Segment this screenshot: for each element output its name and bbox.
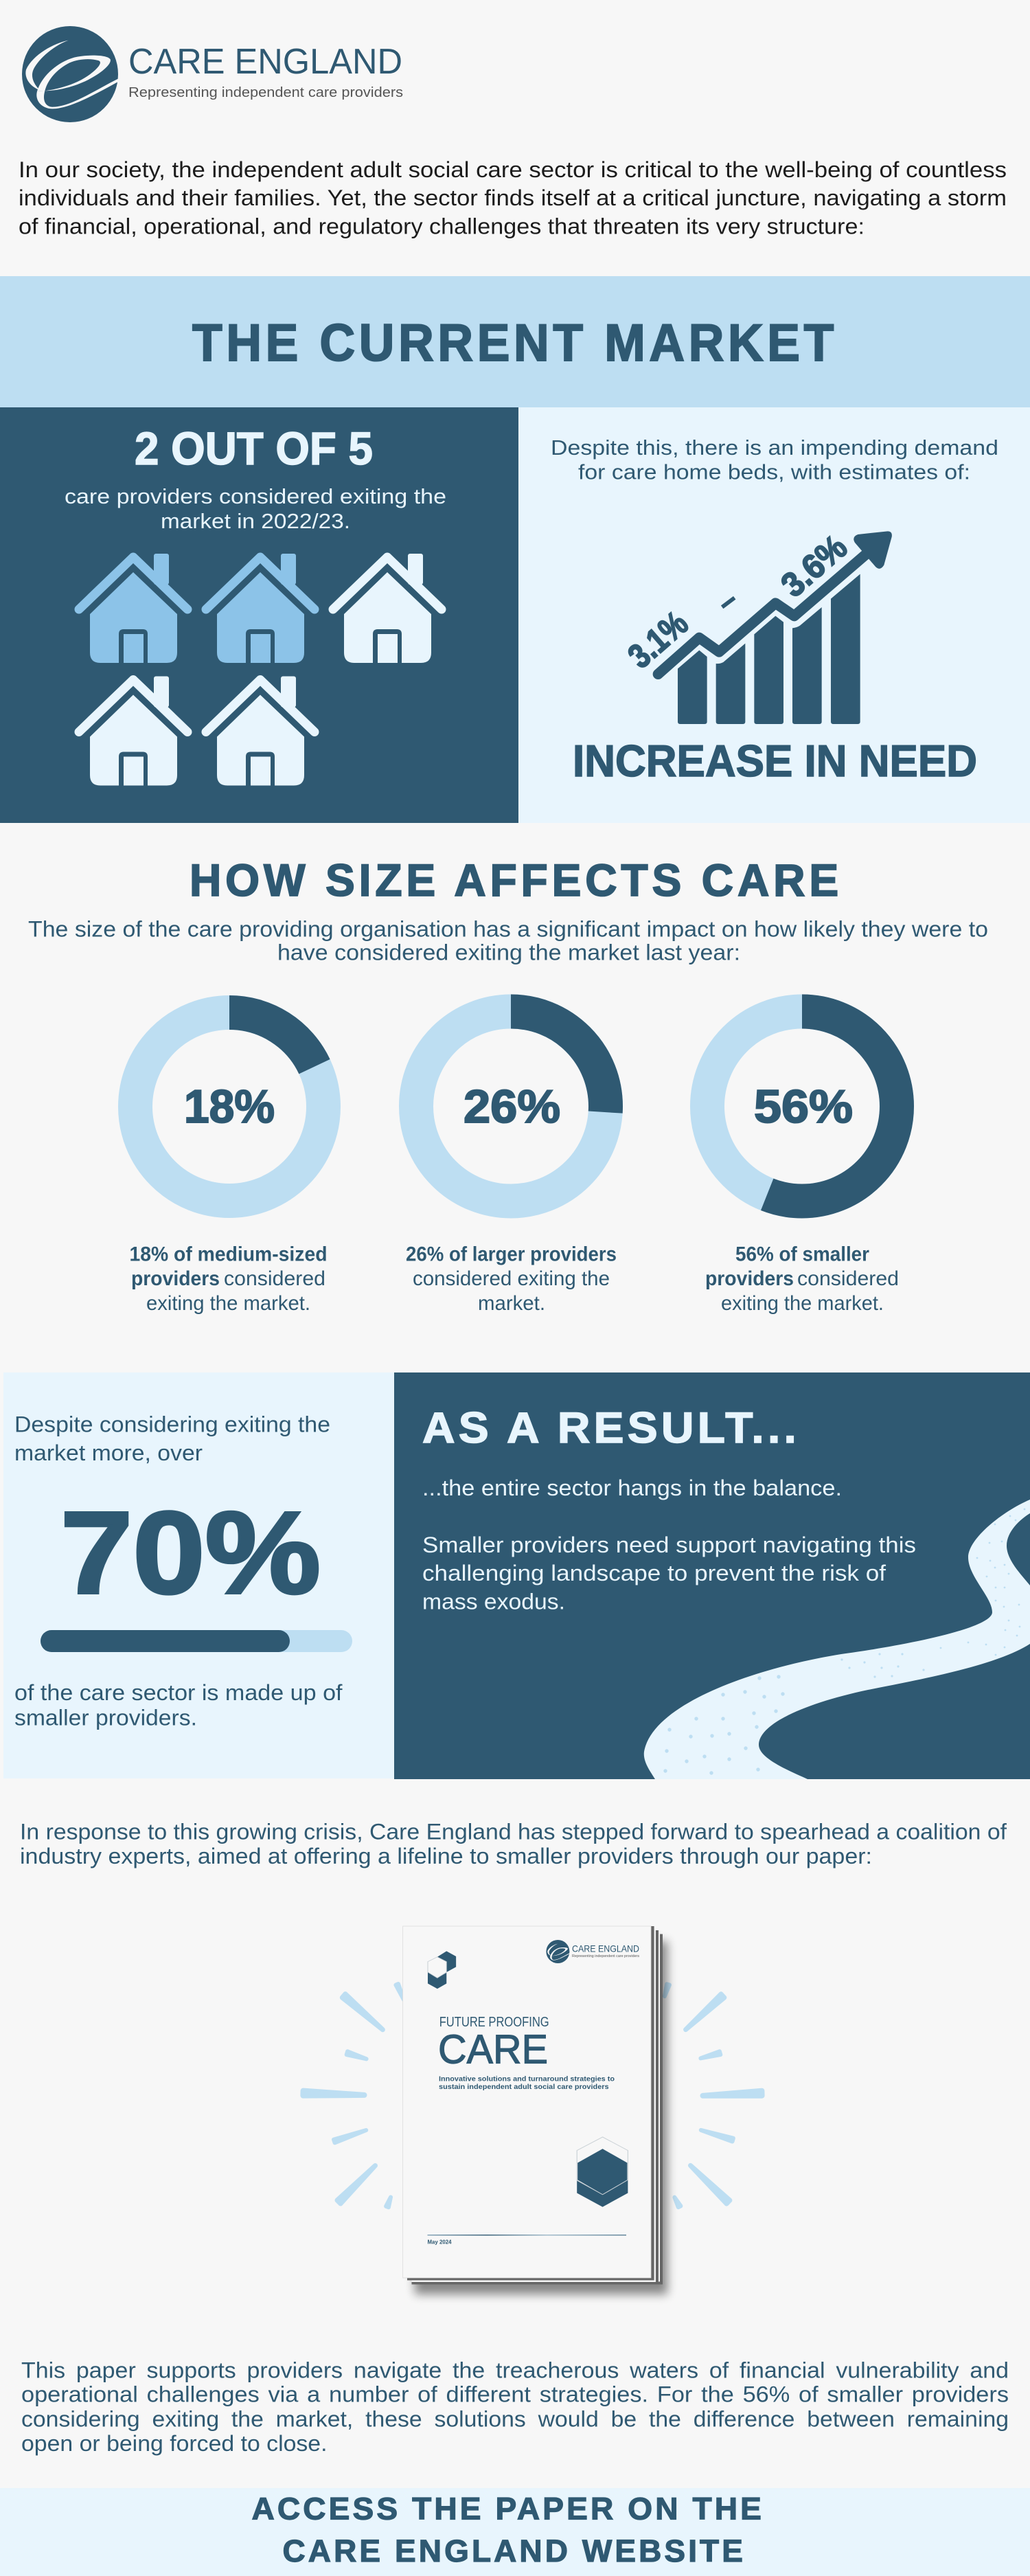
call to action text: ACCESS THE PAPER ON THE [251,2491,764,2527]
heading: the current market: THE CURRENT MARKET [192,314,838,372]
cover logo [546,1940,640,1963]
closing paragraph [21,2358,1009,2456]
cover page [403,1926,651,2278]
cover title: Innovative solutions and turnaround strategies to [439,2075,615,2083]
closing paragraph: This paper supports providers navigate the treacherous waters of financial vulnerability and [21,2358,1009,2382]
intro paragraph: of financial, operational, and regulatory challenges that threaten its very structure: [19,214,865,239]
banner: the current market [0,276,1030,407]
heading: as a result: AS A RESULT... [422,1404,800,1452]
stat value: 70% [60,1488,321,1618]
chart: rising bars with arrow [621,528,892,724]
caption: larger: 26% of larger providers [406,1243,617,1265]
caption: larger [406,1243,617,1315]
response paragraph: industry experts, aimed at offering a lifeline to smaller providers through our paper: [20,1844,872,1868]
stat heading: 2 OUT OF 5 [135,423,373,475]
stat follow-on: of the care sector is made up of [14,1680,343,1705]
caption: smaller: 56% of smaller [735,1243,869,1265]
demand text: Despite this, there is an impending demand [551,436,998,460]
caption: smaller: providers [705,1267,794,1290]
stat description: market in 2022/23. [161,509,350,533]
response paragraph [20,1819,1007,1868]
panel: 70% stat [3,1372,394,1778]
closing paragraph: open or being forced to close. [21,2431,327,2456]
logo: Care England [22,26,403,122]
result text: challenging landscape to prevent the risk of [422,1561,886,1585]
cover title: CARE [438,2026,548,2072]
donut: 26% larger [416,1011,606,1201]
stat description: care providers considered exiting the [65,484,446,508]
logo mark [22,26,118,122]
cover hexagon bottom-right [577,2137,628,2207]
logo wordmark: CARE ENGLAND [128,42,402,82]
result text [422,1476,916,1614]
heading: how size affects care: HOW SIZE AFFECTS CARE [190,855,843,905]
stat description [65,484,446,533]
result text: ...the entire sector hangs in the balance. [422,1476,842,1500]
caption: smaller [705,1243,899,1315]
size intro text: have considered exiting the market last year: [277,940,740,964]
closing paragraph: operational challenges via a number of different strategies. For the 56% of smaller providers [21,2382,1009,2407]
label: dash: – [710,582,744,620]
value: 18% [184,1081,275,1133]
label: 3.1%: 3.1% [621,604,695,675]
stat lead-in: Despite considering exiting the [14,1412,330,1437]
house icons: 2 of 5 highlighted [79,554,442,786]
caption: medium-sized: 18% of medium-sized [129,1243,327,1265]
value: 56% [754,1081,853,1133]
size intro text: The size of the care providing organisation has a significant impact on how likely they were to [28,916,988,941]
river illustration [644,1500,1030,1779]
demand text [551,436,998,484]
stat follow-on: smaller providers. [14,1705,197,1730]
cover logo: CARE ENGLAND [572,1943,639,1954]
report cover stack [403,1926,667,2294]
donut: 18% medium-sized [135,1013,323,1201]
caption: larger: market. [478,1292,545,1315]
caption: medium-sized: exiting the market. [146,1292,310,1315]
panel: as a result [394,1372,1030,1779]
label: 3.6%: 3.6% [774,528,854,605]
cover date: May 2024 [427,2239,452,2246]
logo tagline: Representing independent care providers [128,85,403,100]
cover title [438,2015,615,2091]
intro paragraph [19,157,1007,239]
closing paragraph: considering exiting the market, these solutions would be the difference between remaining [21,2407,1009,2432]
heading: increase in need: INCREASE IN NEED [573,736,977,786]
cover title: sustain independent adult social care providers [439,2083,609,2091]
demand text: for care home beds, with estimates of: [578,460,970,484]
caption: medium-sized [129,1243,327,1315]
stat lead-in [14,1412,330,1465]
panel: increase in need [518,407,1030,823]
stat lead-in: market more, over [14,1440,203,1465]
intro paragraph: In our society, the independent adult social care sector is critical to the well-being of countless [19,157,1007,182]
donut: 56% smaller [707,1011,897,1201]
caption: smaller: exiting the market. [721,1292,884,1315]
footer call to action [0,2488,1030,2576]
caption: medium-sized: considered [224,1267,325,1290]
value: 26% [464,1081,560,1133]
intro paragraph: individuals and their families. Yet, the sector finds itself at a critical juncture, navigating a storm [19,185,1007,210]
call to action text [251,2491,764,2568]
panel: 2 out of 5 [0,407,518,823]
size intro text [28,916,988,964]
result text: Smaller providers need support navigating this [422,1533,916,1557]
cover logo: Representing independent care providers [572,1954,640,1958]
call to action text: CARE ENGLAND WEBSITE [283,2533,746,2568]
stat follow-on [14,1680,343,1730]
burst rays around the report [303,1984,762,2207]
caption: larger: considered exiting the [413,1267,610,1290]
response paragraph: In response to this growing crisis, Care England has stepped forward to spearhead a coalition of [20,1819,1007,1844]
caption: smaller: considered [797,1267,899,1290]
progress bar [41,1630,352,1652]
cover hexagon top-left [428,1951,456,1989]
cover title: FUTURE PROOFING [439,2015,549,2030]
result text: mass exodus. [422,1590,565,1614]
caption: medium-sized: providers [131,1267,220,1290]
